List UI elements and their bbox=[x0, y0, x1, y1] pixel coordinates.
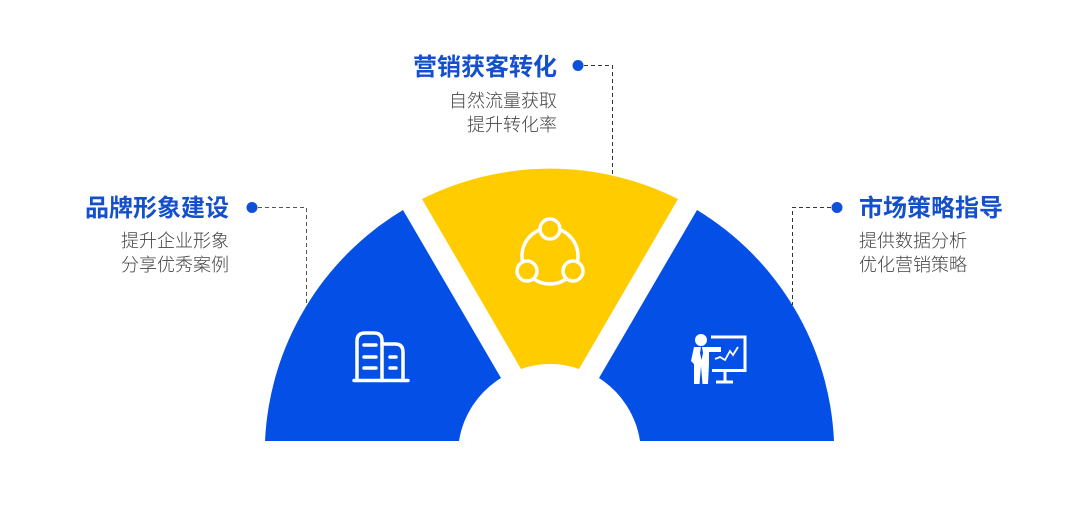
description: brand image: 提升企业形象 bbox=[121, 231, 229, 251]
icon: three-node cycle bbox=[517, 219, 583, 284]
description: marketing conversion: 自然流量获取 bbox=[449, 91, 557, 111]
connector: centre bbox=[572, 60, 612, 176]
description: marketing conversion bbox=[449, 91, 557, 135]
text block: centre bbox=[413, 54, 557, 135]
description: market strategy: 优化营销策略 bbox=[859, 255, 967, 275]
description: marketing conversion: 提升转化率 bbox=[467, 115, 557, 135]
icon: presenter with chart board bbox=[691, 334, 745, 384]
heading: brand image: 品牌形象建设 bbox=[85, 195, 229, 222]
description: market strategy: 提供数据分析 bbox=[859, 231, 967, 251]
segment: left blue bbox=[265, 210, 501, 441]
description: brand image: 分享优秀案例 bbox=[121, 255, 229, 275]
icon: buildings bbox=[354, 333, 408, 380]
heading: market strategy: 市场策略指导 bbox=[859, 195, 1003, 222]
text block: right bbox=[859, 195, 1003, 275]
segment: right blue bbox=[599, 210, 834, 441]
segment: centre yellow bbox=[422, 169, 678, 369]
connector: left bbox=[246, 202, 306, 305]
connector: right bbox=[792, 202, 842, 305]
text block: left bbox=[85, 195, 229, 275]
description: market strategy bbox=[859, 231, 967, 275]
heading: marketing conversion: 营销获客转化 bbox=[413, 54, 557, 81]
description: brand image bbox=[121, 231, 229, 275]
